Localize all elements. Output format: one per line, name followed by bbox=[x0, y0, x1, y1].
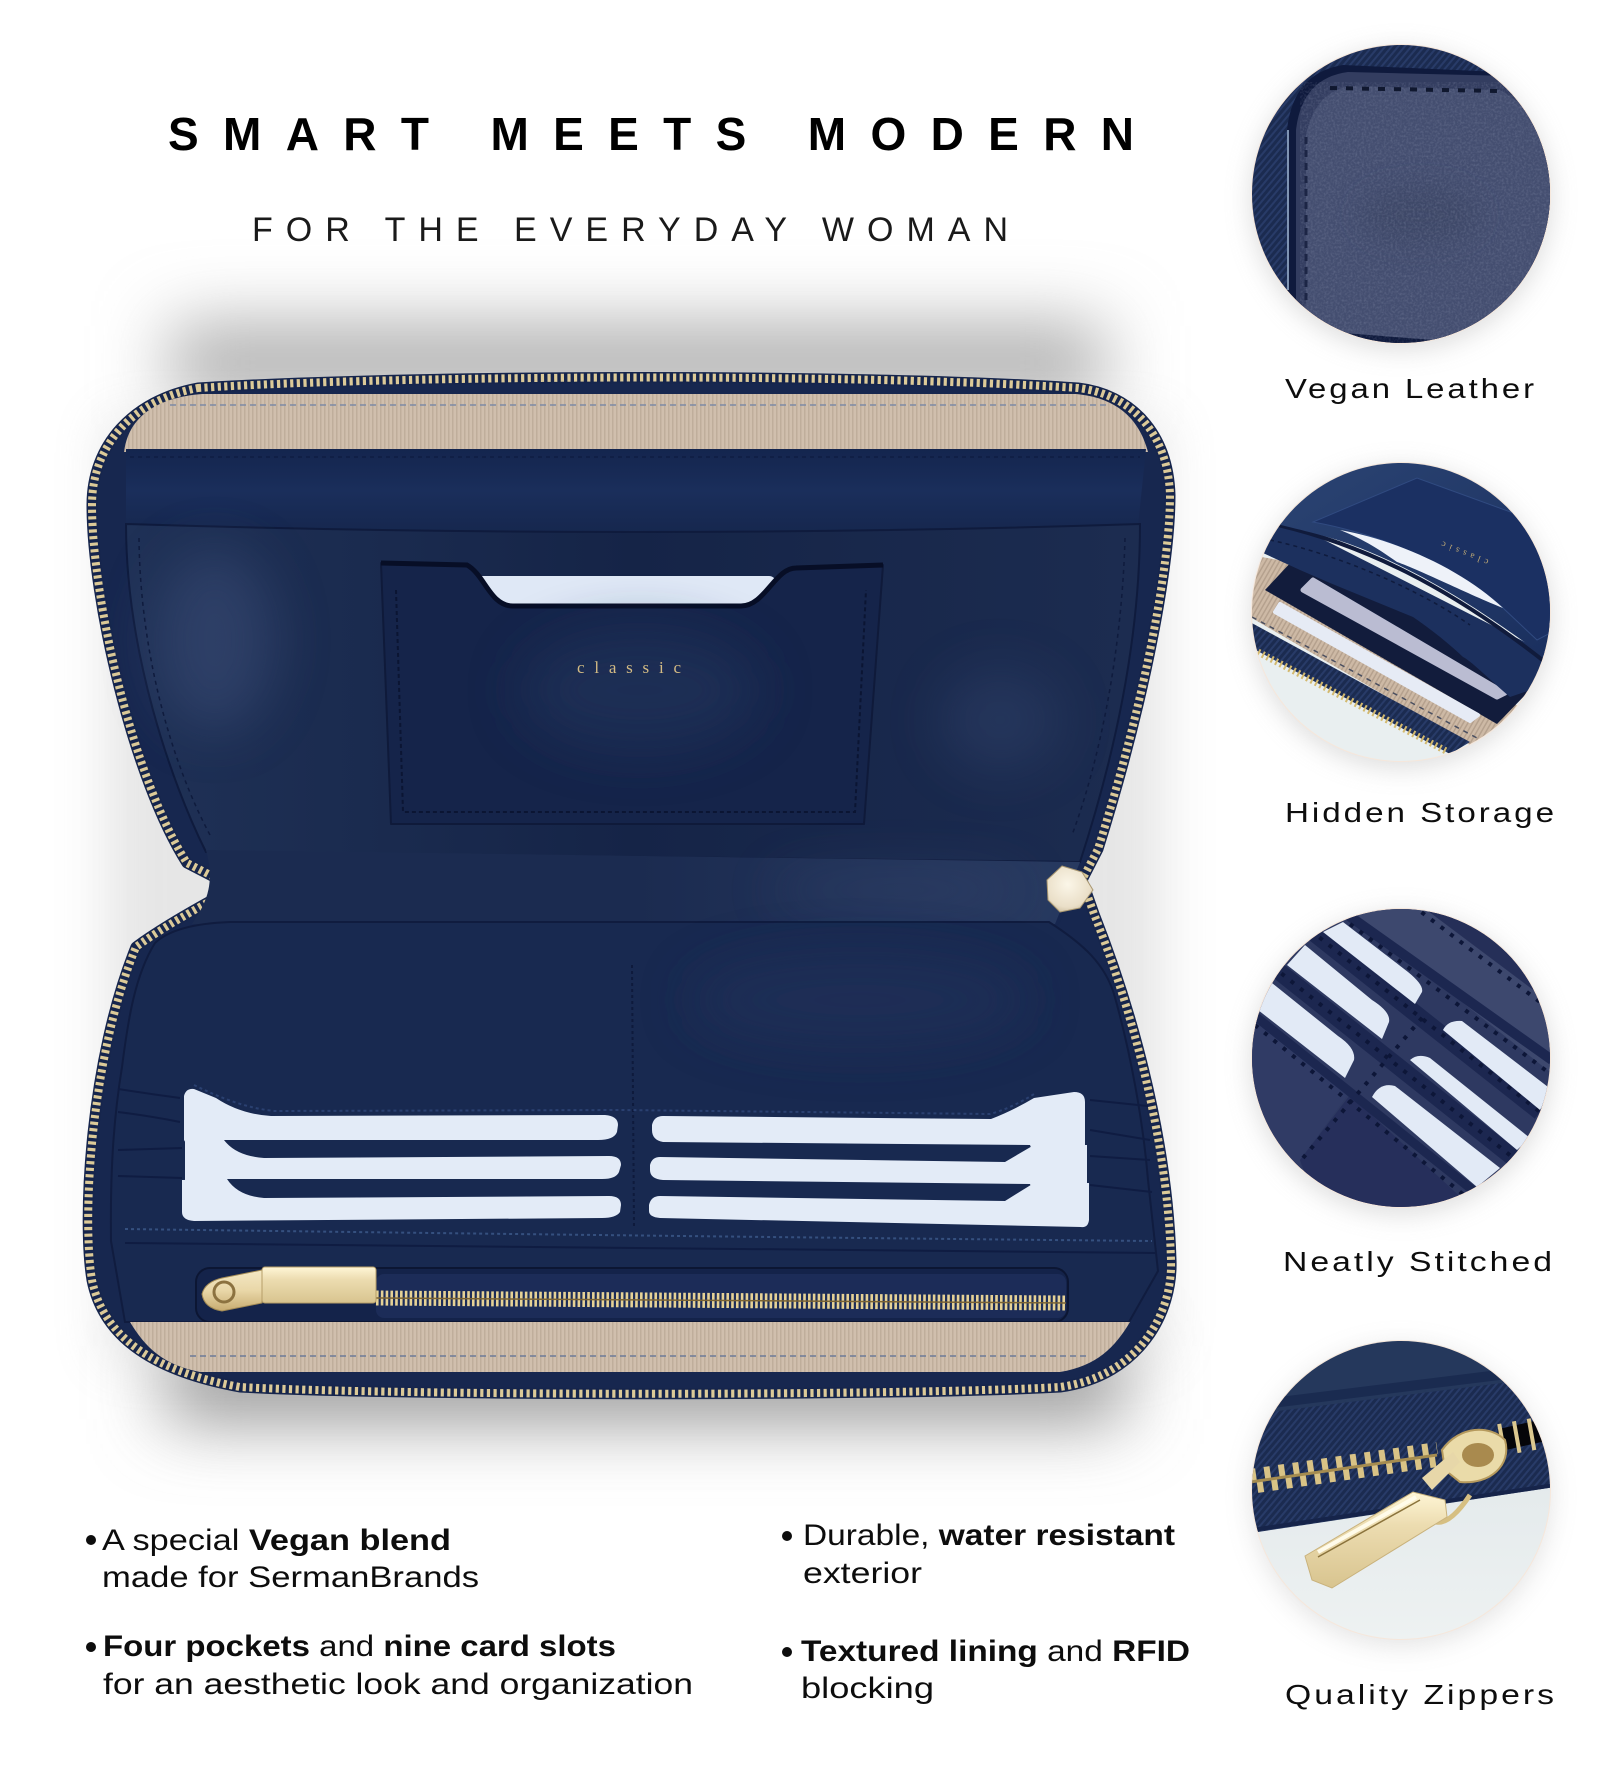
bullet: water resistant: Durable, water resistant bbox=[803, 1519, 1175, 1552]
teeth bbox=[1250, 1448, 1437, 1475]
photo circle: vegan leather bbox=[1250, 40, 1560, 352]
center stitching bbox=[632, 965, 634, 1227]
woven band bbox=[1250, 622, 1470, 754]
small zipper bbox=[1258, 652, 1448, 752]
upper inner panel bbox=[126, 524, 1140, 862]
label: Hidden Storage: Hidden Storage bbox=[1285, 797, 1557, 828]
hinge band bbox=[192, 850, 1080, 924]
label: Neatly Stitched: Neatly Stitched bbox=[1283, 1246, 1555, 1277]
wallet bbox=[88, 377, 1171, 1394]
top panel bbox=[1280, 463, 1550, 656]
bullet: lining and RFID: blocking bbox=[801, 1672, 934, 1705]
lower inner panel bbox=[111, 922, 1158, 1322]
wallet shadow bbox=[105, 325, 1165, 1420]
bullet: water resistant bbox=[782, 1519, 1175, 1590]
zipper pull bbox=[202, 1267, 376, 1311]
bullet: vegan blend: A special Vegan blend bbox=[102, 1524, 451, 1557]
bullet: vegan blend: made for SermanBrands bbox=[102, 1561, 479, 1594]
wallet zipper outline bbox=[88, 377, 1171, 1394]
leather wedges bbox=[1252, 1020, 1302, 1170]
bullet: pockets and card slots: Four pockets and nine card slots bbox=[103, 1630, 616, 1663]
slider bbox=[1442, 1430, 1506, 1482]
stitched strips bbox=[1250, 913, 1552, 1192]
lining bbox=[1250, 555, 1540, 745]
hinge cap bbox=[1047, 866, 1093, 912]
bullet: lining and RFID bbox=[782, 1635, 1190, 1705]
bullet: pockets and card slots bbox=[86, 1630, 693, 1701]
pull tab bbox=[1305, 1492, 1447, 1588]
upper pocket band bbox=[126, 449, 1146, 533]
photo circle: neatly stitched bbox=[1250, 905, 1560, 1215]
photo circle: hidden storage bbox=[1240, 455, 1560, 768]
label: Vegan Leather: Vegan Leather bbox=[1285, 373, 1537, 404]
inner zip pocket bbox=[196, 1268, 1068, 1322]
pocket leather bbox=[381, 563, 883, 824]
label: Quality Zippers: Quality Zippers bbox=[1285, 1679, 1557, 1710]
woven tape bbox=[1250, 1378, 1555, 1532]
cards bbox=[1303, 580, 1505, 697]
card pocket bbox=[381, 563, 883, 824]
bullet: pockets and card slots: for an aesthetic look and organization bbox=[103, 1668, 693, 1701]
brand mark: classic bbox=[577, 658, 681, 677]
bullet: water resistant: exterior bbox=[803, 1557, 922, 1590]
top beige lining bbox=[124, 394, 1148, 452]
leather bbox=[1274, 1341, 1504, 1412]
title: SMART MEETS MODERN bbox=[168, 108, 1134, 160]
photo circle: quality zippers bbox=[1250, 1335, 1555, 1646]
card slots bbox=[182, 1089, 1089, 1227]
leather strap bbox=[1264, 522, 1544, 697]
card in pocket bbox=[468, 576, 776, 612]
bullet: lining and RFID: Textured lining and RFID bbox=[801, 1635, 1190, 1668]
dark slot bbox=[1265, 560, 1530, 724]
card slot lines bbox=[118, 1085, 1155, 1253]
cards bbox=[1258, 922, 1552, 1187]
bottom beige lining bbox=[130, 1322, 1130, 1372]
subtitle: FOR THE EVERYDAY WOMAN bbox=[252, 211, 1008, 249]
bullet: vegan blend bbox=[86, 1524, 479, 1594]
tiny brand mark: classic bbox=[1440, 539, 1490, 567]
